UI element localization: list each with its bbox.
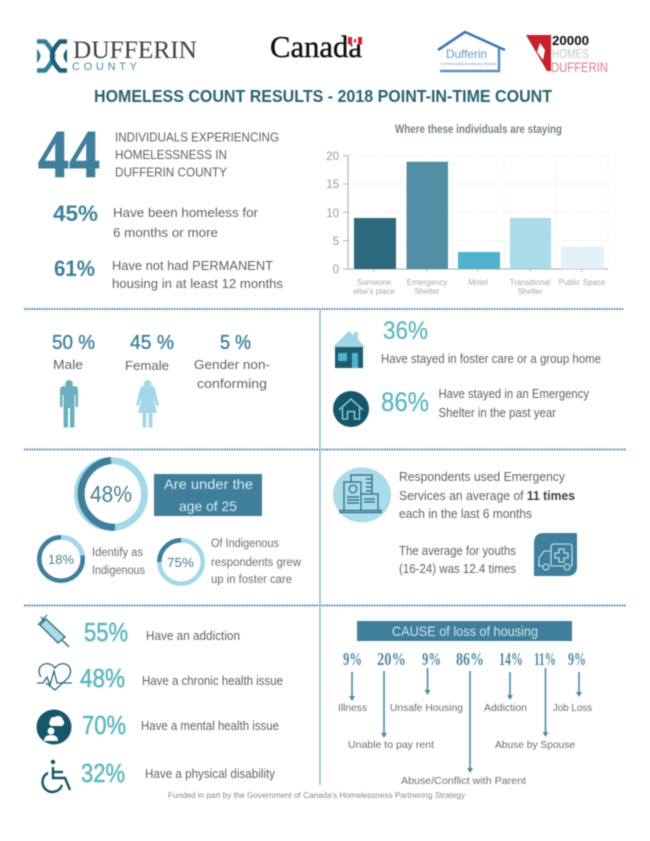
panel: emergency services [333, 468, 577, 576]
bar chart: where these individuals are staying: Shelter [414, 287, 440, 296]
stat: female [125, 332, 174, 428]
text: youth average [399, 543, 516, 576]
bar chart: where these individuals are staying: 20 [326, 151, 339, 163]
logo: 20,000 Homes Dufferin: HOMES [552, 46, 589, 61]
callout: under the age of 25: age of 25 [179, 498, 237, 514]
stat: chronic health issue: 48% [80, 663, 125, 693]
bar chart: where these individuals are staying: 0 [333, 264, 339, 276]
stat: male: 50 % [52, 332, 95, 354]
stat: mental health issue [36, 710, 279, 744]
cause: unable to pay rent [348, 649, 434, 751]
bar chart: where these individuals are staying: Public Space [559, 278, 606, 287]
stat: 44 individuals: DUFFERIN COUNTY [115, 164, 227, 180]
text: youth average: The average for youths [399, 543, 516, 558]
stat: 61 percent no permanent housing: 61% [54, 256, 95, 281]
text: emergency services average: Services an average of 11 times [399, 488, 575, 503]
cause: abuse by spouse [495, 649, 575, 751]
donut: 48 percent: 48% [90, 481, 132, 507]
stat: 61 percent no permanent housing: housing in at least 12 months [112, 276, 284, 291]
icon: heart with pulse [37, 664, 72, 690]
cause: addiction: Addiction [484, 702, 527, 714]
donut: 75 percent [159, 540, 203, 584]
text: identify as indigenous [92, 547, 145, 577]
banner: CAUSE of loss of housing [392, 623, 538, 639]
footer credit: Funded in part by the Government of Canada's Homelessness Partnering Strategy [168, 790, 466, 800]
stat: 44 individuals [38, 116, 279, 192]
icon: female figure [136, 380, 159, 428]
icon: wheelchair [42, 760, 70, 792]
cause: unable to pay rent: 20% [377, 649, 406, 669]
logo: Canada wordmark: Canada [270, 29, 362, 64]
bar chart: where these individuals are staying [326, 124, 608, 296]
cause: job loss: Job Loss [553, 702, 592, 714]
stat: physical disability [42, 758, 275, 792]
logo: Dufferin County: COUNTY [72, 61, 138, 73]
icon: syringe [38, 615, 69, 647]
cause: addiction [484, 649, 527, 714]
panel: health issues [36, 615, 283, 792]
text: emergency services average: each in the last 6 months [399, 506, 532, 521]
cause: unsafe housing: Unsafe Housing [390, 702, 463, 714]
panel: age and indigenous statistics [39, 460, 302, 586]
cause: unable to pay rent: Unable to pay rent [348, 739, 434, 751]
icon: male figure [60, 380, 78, 428]
stat: male [52, 332, 95, 428]
stat: 44 individuals: 44 [38, 116, 100, 192]
stat: addiction: Have an addiction [146, 628, 240, 643]
logo: Dufferin Community Advisory Board: Dufferin [446, 47, 487, 61]
logo: Dufferin County [37, 37, 197, 73]
stat: 44 individuals: INDIVIDUALS EXPERIENCING [115, 130, 279, 144]
stat: addiction: 55% [84, 617, 128, 647]
cause: abuse or conflict with parent [401, 649, 526, 787]
icon: house in circle [333, 391, 369, 427]
stat: 45 percent homeless 6 months [53, 201, 259, 240]
stat: 61 percent no permanent housing: Have not had PERMANENT [112, 258, 273, 273]
stat: chronic health issue [37, 663, 283, 693]
donut: 18 percent: 18% [48, 552, 74, 567]
bar chart: where these individuals are staying: Emergency [407, 278, 447, 287]
stat: gender non-conforming [194, 332, 270, 391]
panel: shelter history [333, 317, 601, 427]
logo: Dufferin Community Advisory Board: Community Advisory Board [440, 61, 496, 66]
text: identify as indigenous: Identify as [92, 547, 143, 559]
text: youth average: (16-24) was 12.4 times [399, 561, 516, 576]
stat: male: Male [53, 357, 83, 372]
cause: job loss [553, 649, 592, 714]
logo: 20,000 Homes Dufferin: 20000 [552, 33, 589, 48]
chart title: Where these individuals are staying [395, 124, 562, 136]
logo: 20,000 Homes Dufferin: DUFFERIN [551, 59, 608, 75]
bar chart: where these individuals are staying: 15 [326, 179, 339, 191]
icon: head with thought cloud [36, 710, 72, 744]
stat: female: 45 % [130, 332, 174, 354]
icon: ambulance [534, 533, 577, 576]
cause: illness: Illness [338, 702, 367, 714]
stat: gender non-conforming: Gender non- [194, 357, 270, 372]
text: indigenous respondents foster care: up in foster care [211, 574, 292, 586]
bar chart: where these individuals are staying: 10 [326, 208, 339, 220]
stat: gender non-conforming: conforming [197, 376, 267, 391]
text: indigenous respondents foster care [211, 538, 302, 586]
panel: gender breakdown [52, 332, 270, 428]
stat: emergency shelter: Shelter in the past year [438, 405, 557, 420]
cause: job loss: 9% [568, 649, 586, 669]
donut: 18 percent [39, 537, 83, 581]
cause: abuse by spouse: 11% [534, 649, 556, 669]
stat: 45 percent homeless 6 months: 6 months or more [113, 225, 218, 240]
text: identify as indigenous: Indigenous [92, 565, 145, 577]
stat: foster care [333, 317, 601, 368]
icon: hospital [333, 468, 391, 522]
bar chart: where these individuals are staying: Someone [357, 278, 392, 287]
stat: 44 individuals: HOMELESSNESS IN [115, 147, 227, 162]
logo: 20,000 Homes Dufferin [526, 33, 608, 75]
cause: illness: 9% [343, 649, 362, 669]
stat: 61 percent no permanent housing [54, 256, 284, 291]
stat: mental health issue: Have a mental health issue [141, 718, 279, 733]
text: indigenous respondents foster care: respondents grew [211, 557, 302, 569]
panel: cause of loss of housing [338, 621, 592, 787]
cause: abuse or conflict with parent: Abuse/Conflict with Parent [401, 775, 526, 787]
bar chart: where these individuals are staying: Shelter [517, 287, 543, 296]
stat: addiction [38, 615, 240, 647]
stat: emergency shelter [333, 386, 589, 427]
cause: abuse or conflict with parent: 86% [456, 649, 484, 669]
stat: 45 percent homeless 6 months: Have been homeless for [113, 205, 259, 220]
text: emergency services average: Respondents used Emergency [399, 469, 565, 484]
donut: 75 percent: 75% [167, 555, 194, 570]
stat: foster care: Have stayed in foster care or a group home [381, 351, 601, 366]
text: emergency services average [399, 469, 575, 521]
callout: under the age of 25: Are under the [164, 476, 253, 492]
text: indigenous respondents foster care: Of Indigenous [211, 538, 279, 550]
bar chart: where these individuals are staying: else's place [353, 287, 395, 296]
title: HOMELESS COUNT RESULTS - 2018 POINT-IN-TIME COUNT [94, 86, 552, 106]
stat: physical disability: Have a physical disability [145, 766, 275, 781]
bar chart: where these individuals are staying: 5 [333, 236, 339, 248]
panel: headline statistics [38, 116, 284, 291]
stat: mental health issue: 70% [82, 710, 126, 740]
stat: emergency shelter: 86% [381, 387, 429, 417]
cause: abuse by spouse: Abuse by Spouse [495, 739, 575, 751]
stat: 45 percent homeless 6 months: 45% [53, 201, 98, 226]
stat: female: Female [125, 358, 169, 373]
stat: gender non-conforming: 5 % [220, 332, 251, 354]
stat: emergency shelter: Have stayed in an Emergency [438, 386, 589, 401]
cause: unsafe housing: 9% [422, 649, 441, 669]
icon: house [333, 331, 365, 368]
cause: addiction: 14% [499, 649, 523, 669]
callout: under the age of 25 [154, 474, 262, 516]
bar chart: where these individuals are staying: Transitional [509, 278, 551, 287]
cause: illness [338, 649, 367, 714]
stat: foster care: 36% [383, 317, 428, 345]
banner [357, 621, 572, 641]
logo: Dufferin Community Advisory Board [438, 32, 505, 71]
stat: physical disability: 32% [81, 758, 125, 788]
cause: unsafe housing [390, 649, 463, 714]
stat: chronic health issue: Have a chronic health issue [142, 673, 283, 688]
donut: 48 percent [78, 460, 144, 528]
logo: Dufferin County: DUFFERIN [73, 37, 197, 64]
bar chart: where these individuals are staying: Motel [468, 278, 488, 287]
